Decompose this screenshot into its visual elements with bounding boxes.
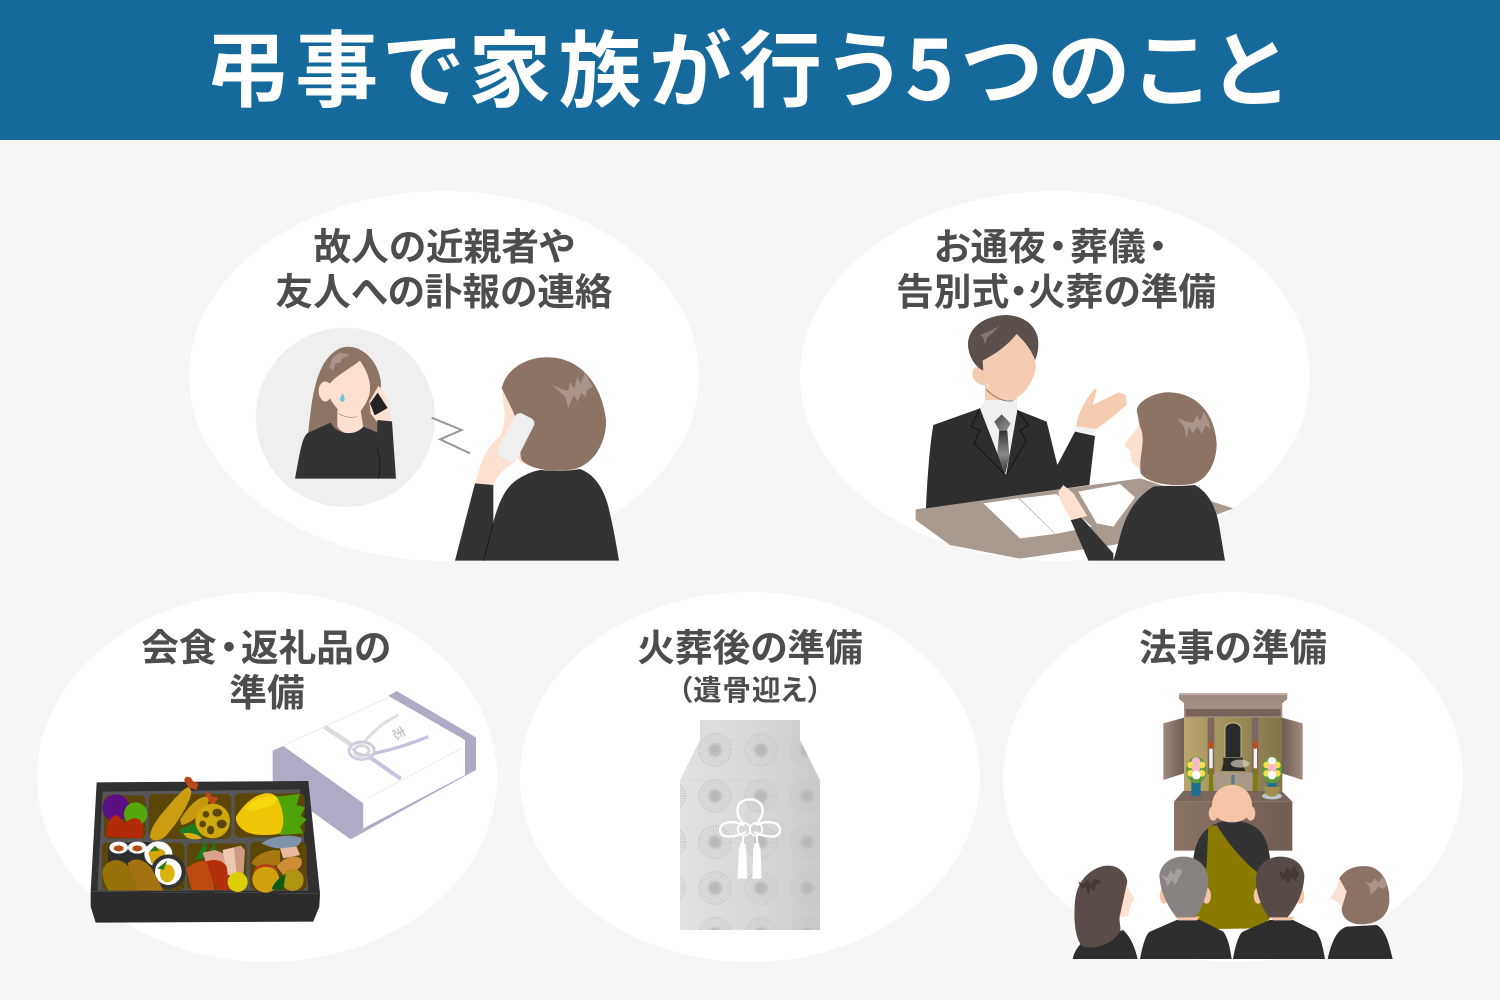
signal zigzag: [432, 418, 470, 453]
food: tempura and lotus root: [184, 777, 199, 790]
panel: memorial service: [1003, 592, 1463, 962]
illustration: phone call: [256, 328, 619, 561]
food: yellow egg and greens: [277, 794, 307, 835]
illustration: consultation with funeral director: [916, 315, 1233, 561]
heading: meals and gifts: 返礼品の: [241, 617, 391, 672]
heading: funeral: お通夜: [934, 216, 1046, 271]
panel: meals and return gifts: [37, 592, 497, 962]
woman calling: [455, 357, 619, 561]
flowers and incense bowl: [1223, 757, 1282, 799]
illustration: Buddhist altar with monk and family: [1073, 693, 1393, 959]
mourner: woman with bob hair: [1328, 866, 1393, 959]
mourner: dark-haired man: [1233, 857, 1325, 959]
man in suit: [926, 315, 1127, 508]
panel: after-cremation preparation: [520, 592, 980, 962]
heading: meals and gifts: 準備: [229, 662, 305, 717]
food: fish and garnish: [195, 838, 216, 860]
heading: funeral: 葬儀: [1070, 216, 1146, 271]
heading: notification: 友人への訃報の連絡: [275, 261, 613, 316]
illustration: gift box and lunch box: [91, 691, 476, 923]
heading: meals and gifts: ・: [220, 617, 238, 672]
heading: after cremation: 火葬後の準備: [637, 617, 863, 672]
candles: [1207, 740, 1260, 798]
gift box: [273, 691, 476, 839]
mourner: grey-haired man: [1140, 857, 1232, 959]
subheading: receiving remains: （遺骨迎え）: [678, 668, 822, 709]
heading: funeral: ・: [1149, 216, 1167, 271]
food: rolls: [108, 842, 173, 867]
table base: [1174, 791, 1292, 802]
panel: funeral preparation: [800, 191, 1310, 561]
Buddhist altar: [1163, 693, 1303, 851]
illustration: urn bag: [680, 720, 820, 930]
table with papers: [916, 478, 1233, 559]
heading: meals and gifts: 会食: [141, 617, 217, 672]
inset circle: woman receiving the call: [256, 328, 435, 507]
heading: memorial: 法事の準備: [1139, 617, 1327, 672]
seated woman: [1058, 392, 1225, 561]
bag body: [680, 720, 820, 930]
tiered lunch box: [91, 777, 320, 923]
title: 弔事で家族が行う5つのこと: [205, 4, 1283, 124]
heading: funeral: 告別式・火葬の準備: [896, 261, 1216, 316]
gift box: 志: [388, 722, 411, 743]
mourner: woman with long hair: [1073, 866, 1138, 959]
flower pattern: [680, 734, 820, 930]
heading: funeral: ・: [1049, 216, 1067, 271]
food: vegetables: [102, 794, 130, 822]
header banner: [0, 0, 1500, 140]
flowers and vase: [1186, 757, 1206, 796]
panel: notifying relatives and friends: [189, 191, 699, 561]
heading: notification: 故人の近親者や: [313, 216, 575, 271]
food: simmered vegetables: [262, 836, 302, 849]
monk: [1193, 785, 1270, 929]
white knot and tassels: [720, 799, 780, 879]
